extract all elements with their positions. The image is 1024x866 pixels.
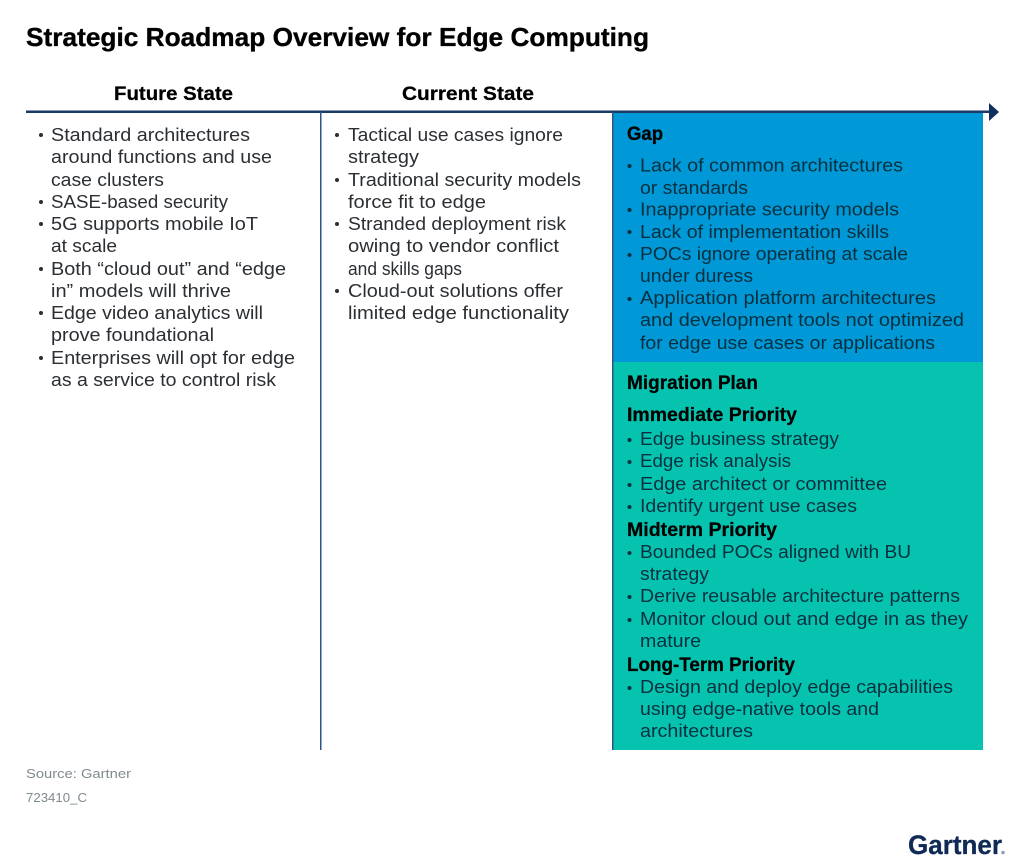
immediate priority: Immediate Priority xyxy=(627,405,797,426)
gap list: and development tools not optimized xyxy=(640,309,964,330)
immediate priority: Identify urgent use cases xyxy=(640,495,857,516)
panel: future state list: as a service to control risk xyxy=(51,369,277,390)
column divider: current and gap xyxy=(612,112,614,750)
panel: current state list: and skills gaps xyxy=(348,258,462,279)
panel: future state list: SASE-based security xyxy=(51,191,229,212)
long-term priority xyxy=(627,655,953,741)
gap list xyxy=(628,154,964,353)
panel: current state list: limited edge functionality xyxy=(348,302,570,323)
document id: 723410_C xyxy=(26,790,87,805)
migration plan heading: Migration Plan xyxy=(627,373,758,394)
gap heading: Gap xyxy=(627,124,663,145)
heading: current state: Current State xyxy=(402,84,534,105)
panel: current state list xyxy=(335,124,581,323)
panel: current state list: Tactical use cases ignore xyxy=(348,124,563,145)
immediate priority xyxy=(627,405,887,516)
heading: future state: Future State xyxy=(114,84,233,105)
panel: future state list: around functions and use xyxy=(51,146,272,167)
source note: Source: Gartner xyxy=(26,766,132,781)
panel: current state list: force fit to edge xyxy=(348,191,486,212)
panel: future state list: Edge video analytics will xyxy=(51,302,263,323)
gap list: POCs ignore operating at scale xyxy=(640,243,908,264)
panel: current state list: strategy xyxy=(348,146,420,167)
midterm priority xyxy=(627,520,969,651)
gap list: Lack of common architectures xyxy=(640,154,903,176)
title: Strategic Roadmap Overview for Edge Computing xyxy=(26,22,649,52)
panel: future state list: Both “cloud out” and “edge xyxy=(51,258,286,279)
panel: future state list: at scale xyxy=(51,235,117,256)
immediate priority: Edge business strategy xyxy=(640,428,840,449)
long-term priority: using edge-native tools and xyxy=(640,698,879,719)
logo: Gartner: Gartner xyxy=(908,830,1002,860)
midterm priority: Midterm Priority xyxy=(627,520,777,541)
panel: future state list: in” models will thrive xyxy=(51,280,231,301)
panel: current state list: Traditional security models xyxy=(348,169,581,190)
column divider: future and current xyxy=(320,112,322,750)
long-term priority: architectures xyxy=(640,720,753,741)
panel: future state list: 5G supports mobile IoT xyxy=(51,213,258,234)
gap list: or standards xyxy=(640,177,748,198)
panel: future state list: prove foundational xyxy=(51,324,214,345)
midterm priority: Monitor cloud out and edge in as they xyxy=(640,608,969,629)
panel: future state list: Enterprises will opt for edge xyxy=(51,347,295,368)
panel: future state list: Standard architectures xyxy=(51,124,250,145)
long-term priority: Long-Term Priority xyxy=(627,655,795,676)
immediate priority: Edge risk analysis xyxy=(640,450,791,471)
panel: current state list: owing to vendor conflict xyxy=(348,235,559,256)
panel: future state list xyxy=(39,124,295,390)
long-term priority: Design and deploy edge capabilities xyxy=(640,676,953,697)
midterm priority: Derive reusable architecture patterns xyxy=(640,585,960,606)
panel: migration plan xyxy=(613,362,983,750)
panel: future state list: case clusters xyxy=(51,169,164,190)
gap list: Inappropriate security models xyxy=(640,198,899,220)
panel: current state list: Cloud-out solutions offer xyxy=(348,280,563,301)
gap list: for edge use cases or applications xyxy=(640,332,935,353)
panel: current state list: Stranded deployment risk xyxy=(348,213,567,234)
arrow: timeline axis xyxy=(26,103,999,121)
gap list: Application platform architectures xyxy=(640,287,936,308)
immediate priority: Edge architect or committee xyxy=(640,473,887,494)
midterm priority: Bounded POCs aligned with BU xyxy=(640,541,911,562)
midterm priority: mature xyxy=(640,630,701,651)
panel: gap xyxy=(613,112,983,362)
midterm priority: strategy xyxy=(640,563,710,584)
gap list: under duress xyxy=(640,265,753,286)
gap list: Lack of implementation skills xyxy=(640,221,889,242)
